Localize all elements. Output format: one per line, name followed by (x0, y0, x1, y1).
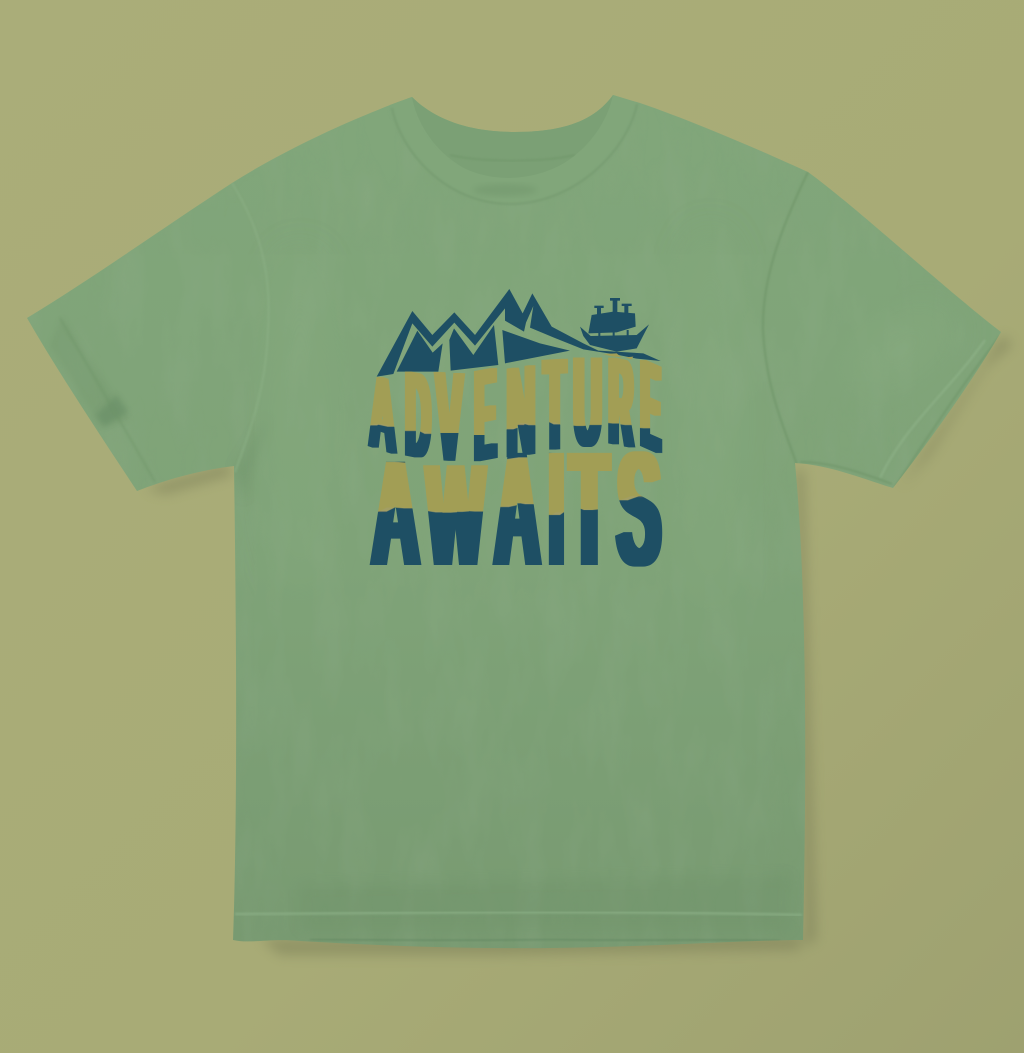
ADVENTURE wavy headline: E (475, 341, 496, 491)
AWAITS headline: S (617, 419, 661, 600)
ship (580, 298, 649, 352)
shirt body and sleeves (27, 95, 1001, 948)
ADVENTURE wavy headline: R (609, 331, 633, 475)
ADVENTURE wavy headline: T (544, 331, 565, 479)
print graphic (370, 289, 661, 601)
ADVENTURE wavy headline: E (641, 333, 660, 481)
right sleeve hem (880, 340, 985, 478)
ADVENTURE wavy headline (370, 331, 660, 491)
shirt drop shadow (145, 335, 1012, 955)
mountains (377, 289, 661, 377)
right sleeve seam (763, 172, 808, 465)
ADVENTURE wavy headline: A (370, 351, 395, 477)
ADVENTURE wavy headline: D (406, 346, 430, 487)
ADVENTURE wavy headline: U (574, 331, 602, 474)
left sleeve seam (232, 183, 269, 472)
collar rib (390, 95, 638, 203)
AWAITS headline: A (372, 429, 419, 597)
fabric shading (62, 173, 995, 942)
neck label seam (450, 155, 575, 161)
ADVENTURE wavy headline: V (436, 345, 463, 490)
bottom hem (235, 912, 802, 915)
water glints (603, 353, 633, 359)
collar shade (392, 104, 637, 204)
inner back of neck (412, 95, 613, 180)
AWAITS headline (372, 418, 661, 601)
AWAITS headline: I (550, 418, 563, 600)
AWAITS headline: W (427, 433, 484, 596)
ADVENTURE wavy headline: N (507, 339, 535, 486)
AWAITS headline: T (570, 419, 609, 601)
AWAITS headline: A (495, 418, 540, 601)
left sleeve hem (60, 318, 155, 482)
